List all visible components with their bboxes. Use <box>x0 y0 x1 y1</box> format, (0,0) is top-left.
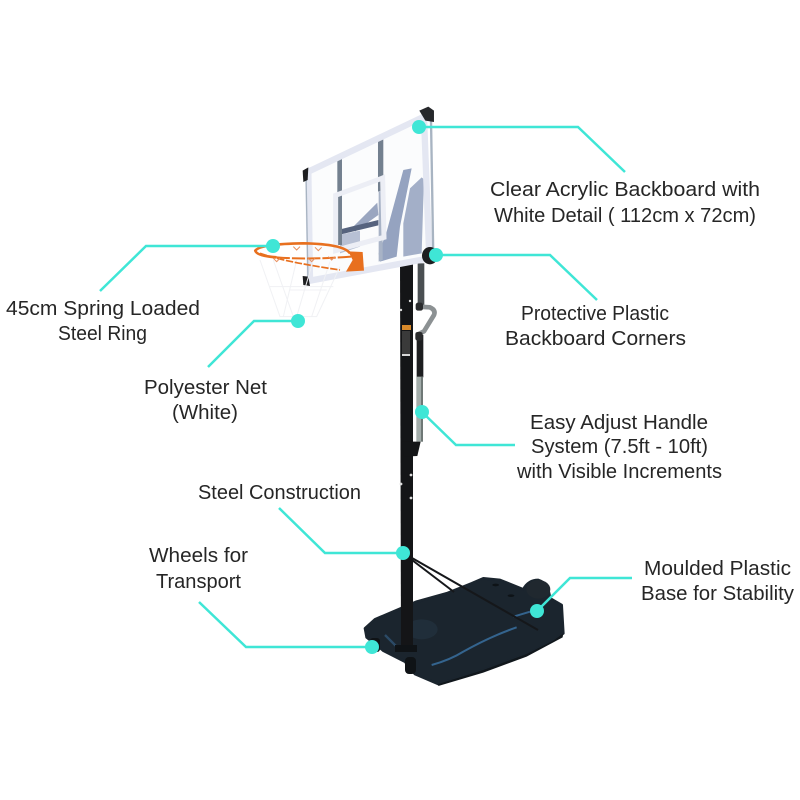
label: backboard: White Detail ( 112cm x 72cm) <box>494 205 756 227</box>
label: backboard <box>490 179 760 227</box>
label: backboard: Clear Acrylic Backboard with <box>490 179 760 201</box>
label: base <box>641 558 794 605</box>
label: net <box>144 377 267 424</box>
label: handle: System (7.5ft - 10ft) <box>531 436 708 458</box>
label: ring: 45cm Spring Loaded <box>6 298 200 320</box>
backboard support shadow <box>337 137 424 262</box>
label: wheels: Transport <box>156 571 241 593</box>
label: ring: Steel Ring <box>58 323 147 345</box>
label: net: (White) <box>172 402 238 424</box>
label: handle <box>516 412 722 483</box>
connector: wheels <box>199 602 372 647</box>
label: base: Base for Stability <box>641 583 794 605</box>
adjust handle system <box>402 263 434 457</box>
label: wheels <box>149 545 248 593</box>
shooter square <box>336 178 384 251</box>
label: corners <box>505 303 686 350</box>
label: base: Moulded Plastic <box>644 558 791 580</box>
wheels <box>370 638 416 674</box>
callout dots <box>266 120 544 654</box>
label: wheels: Wheels for <box>149 545 248 567</box>
clear acrylic backboard <box>303 107 438 286</box>
backboard frame <box>308 117 429 281</box>
connector: net <box>208 321 298 367</box>
main steel pole <box>395 262 417 652</box>
connector: handle <box>422 412 515 445</box>
label: corners: Backboard Corners <box>505 328 686 350</box>
label: steel: Steel Construction <box>198 482 361 504</box>
connector: backboard <box>419 127 625 172</box>
moulded plastic base <box>365 578 563 686</box>
connector: base <box>537 578 632 611</box>
label: handle: with Visible Increments <box>516 461 722 483</box>
corner caps <box>419 107 434 122</box>
handle grip <box>417 307 434 335</box>
braces <box>412 558 538 630</box>
spring loaded steel ring <box>255 243 364 272</box>
label: handle: Easy Adjust Handle <box>530 412 708 434</box>
connector: steel <box>279 508 403 553</box>
label: ring <box>6 298 200 345</box>
label: corners: Protective Plastic <box>521 303 669 325</box>
polyester net <box>260 260 340 317</box>
connector: ring <box>100 246 273 291</box>
connector: corners <box>436 255 597 300</box>
label: net: Polyester Net <box>144 377 267 399</box>
callout connectors <box>100 127 632 647</box>
